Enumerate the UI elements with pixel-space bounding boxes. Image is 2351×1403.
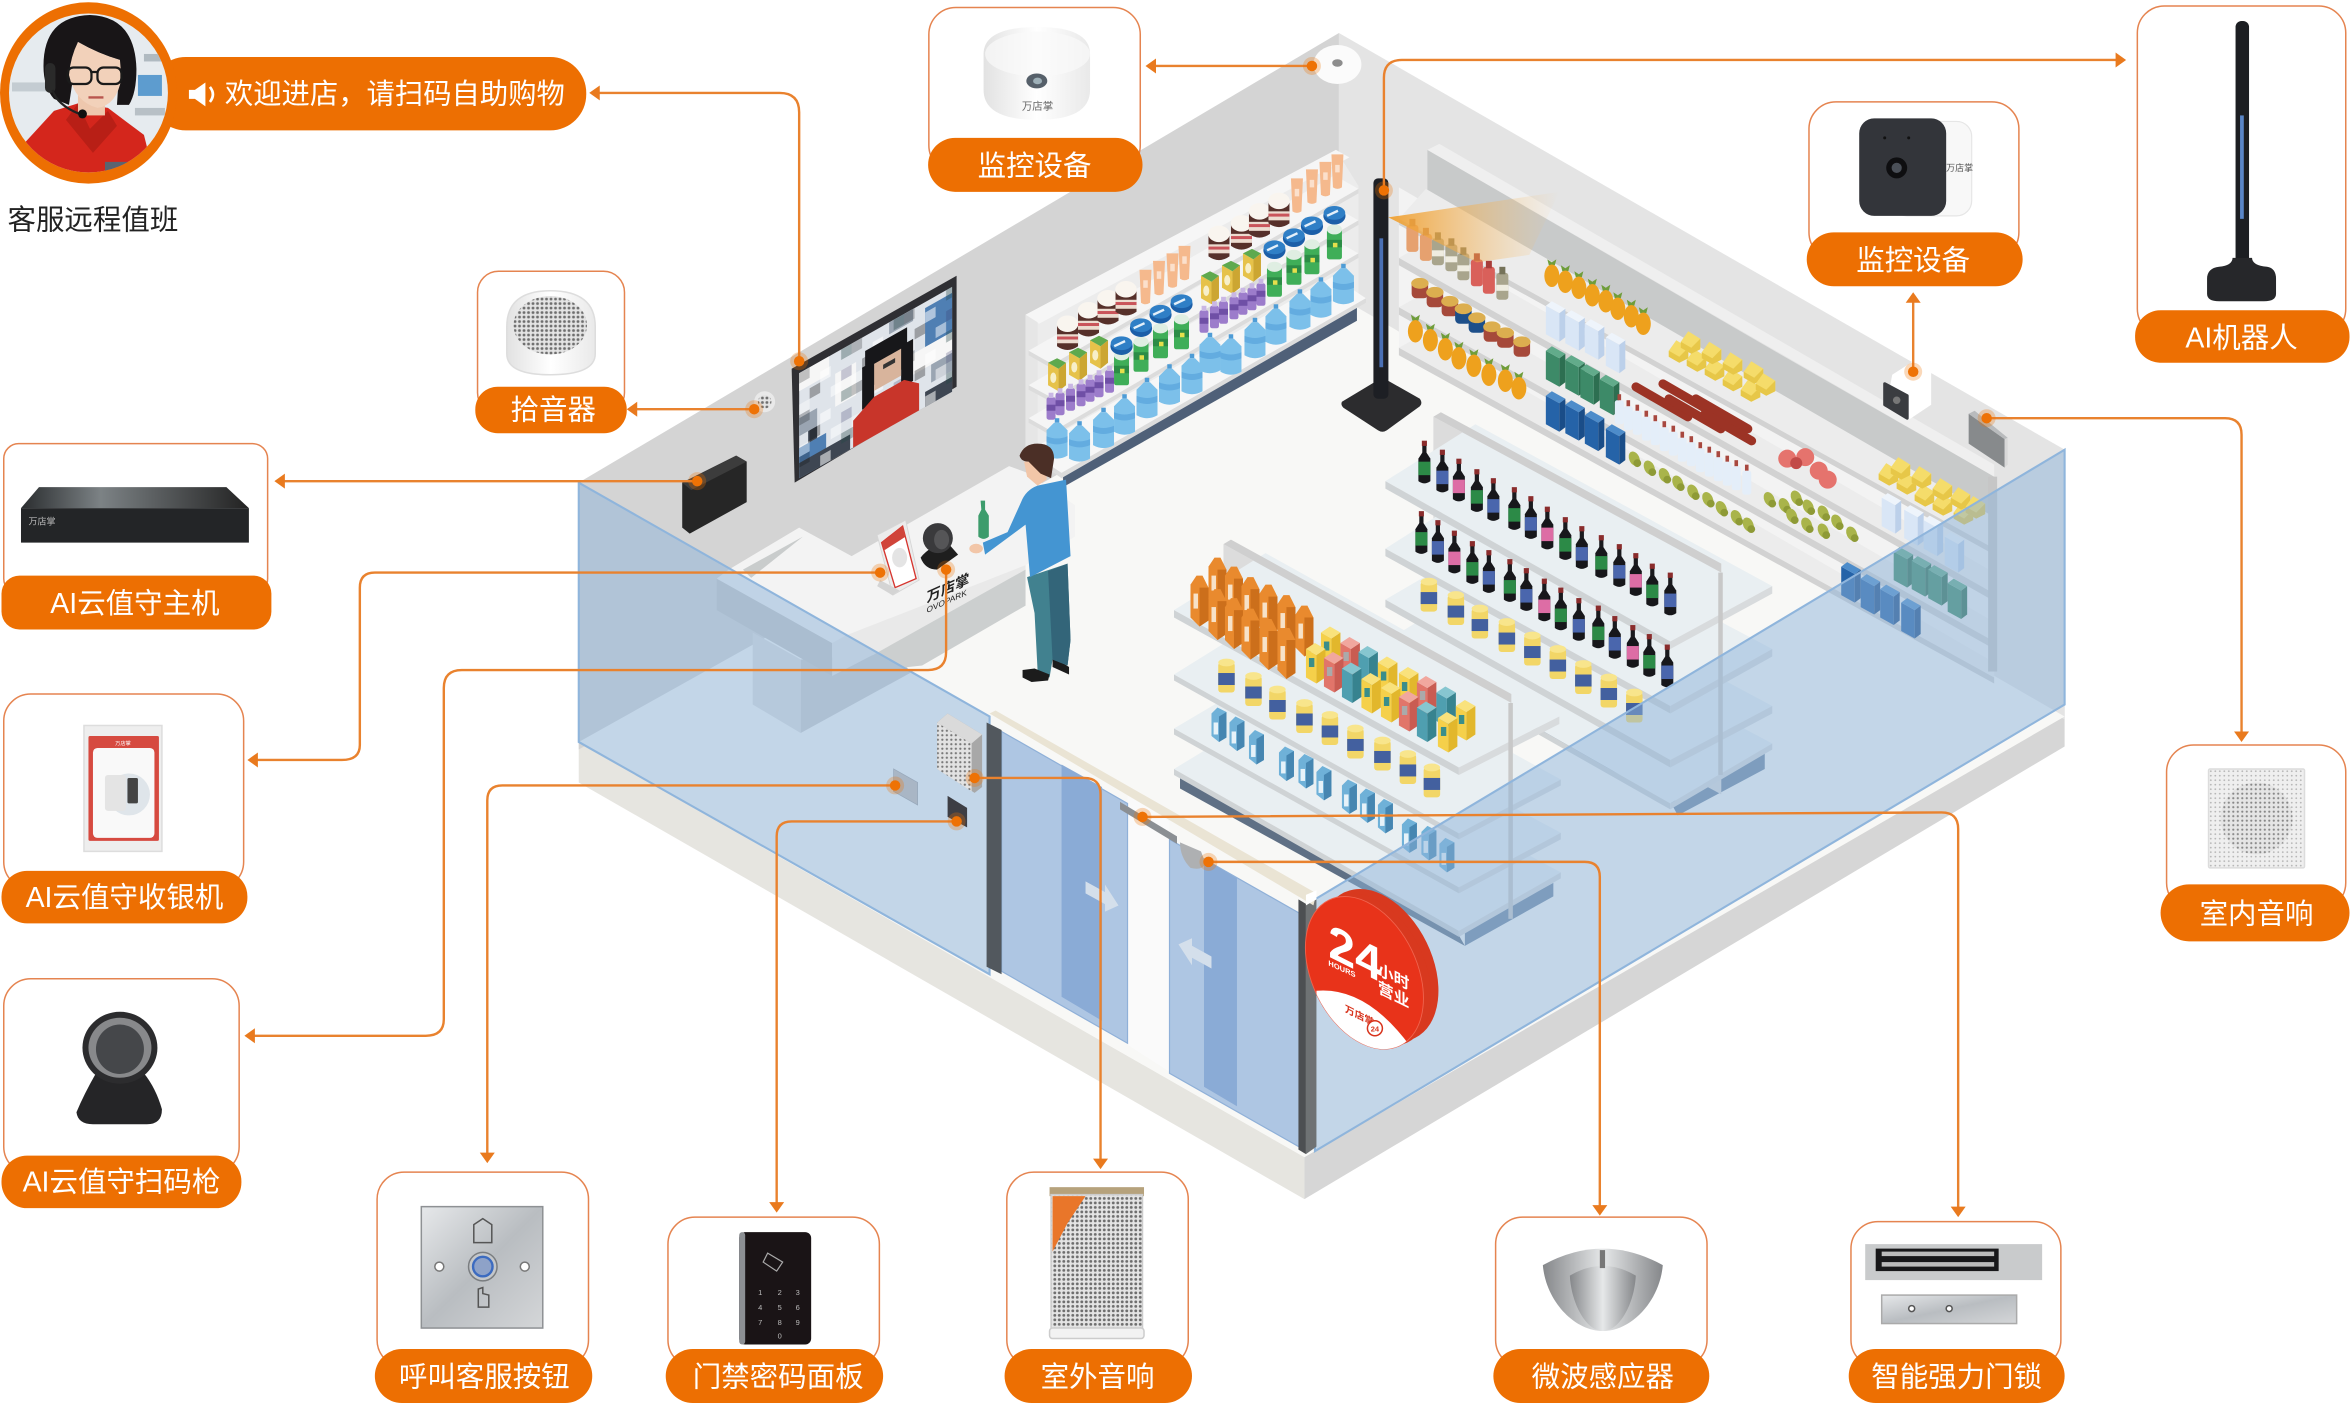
connector: outdoor speaker (966, 769, 1108, 1169)
icon: dome sensor (1543, 1249, 1663, 1331)
device: indoor wall speaker (1969, 411, 2008, 468)
icon: keypad: 3 (796, 1288, 800, 1297)
label: 监控设备 (1856, 245, 1970, 277)
panel: AI robot (2135, 6, 2350, 363)
panel: smart magnetic lock (1849, 1222, 2065, 1403)
icon: keypad: 0 (778, 1332, 782, 1341)
round 24 hour sign (1282, 870, 1462, 1069)
label: 监控设备 (978, 150, 1092, 182)
person scanning a product (969, 444, 1071, 682)
connector: AI host (274, 472, 706, 490)
store base plinth (579, 704, 2065, 1199)
connector: wall camera (1904, 292, 1922, 381)
label: 室外音响 (1041, 1362, 1154, 1394)
connector: sound pickup (627, 400, 763, 418)
label (1493, 1349, 1709, 1403)
round 24 hour sign: 小时 (1378, 960, 1410, 994)
icon: robot pole (2207, 21, 2276, 301)
connector: microwave sensor (1199, 853, 1607, 1216)
label: AI云值守收银机 (26, 882, 223, 914)
device: cashier terminal on counter (877, 520, 919, 595)
icon: magnetic lock (1865, 1244, 2042, 1324)
panel: wall monitoring device (1807, 102, 2023, 286)
label (1005, 1349, 1192, 1403)
glass front walls (579, 450, 2065, 1151)
upper gondola shelf with wine and cans (1385, 412, 1772, 815)
device: call button plate (894, 769, 918, 805)
label (928, 138, 1143, 192)
icon: ceiling camera: 万店掌 (1022, 99, 1053, 112)
caption: 客服远程值班 (7, 204, 178, 236)
connector: access keypad (769, 812, 966, 1213)
label: 门禁密码面板 (693, 1362, 864, 1394)
connector: greeting to TV (589, 85, 808, 370)
label: AI云值守扫码枪 (23, 1167, 220, 1199)
label: 微波感应器 (1532, 1362, 1674, 1394)
round 24 hour sign: 营业 (1378, 978, 1409, 1012)
panel: outdoor speaker (1005, 1172, 1192, 1403)
round 24 hour sign: HOURS (1328, 959, 1355, 979)
label: 呼叫客服按钮 (399, 1362, 570, 1394)
speech bubble: 欢迎进店，请扫码自助购物 (225, 78, 565, 110)
label: AI机器人 (2185, 323, 2298, 355)
panel: AI cashier (1, 694, 247, 923)
connector: smart lock (1134, 808, 1966, 1217)
panel: AI scanner (1, 979, 241, 1208)
connector: AI scanner (244, 561, 955, 1043)
icon: keypad: 7 (758, 1318, 762, 1327)
illustration: isometric store (579, 33, 2065, 1199)
icon: keypad: 9 (796, 1318, 800, 1327)
label (666, 1349, 883, 1403)
right wall shelving (1399, 144, 1997, 684)
icon: keypad (739, 1232, 811, 1345)
icon: barcode scanner (76, 1012, 162, 1124)
avatar portrait (0, 0, 180, 187)
icon: keypad: 2 (778, 1288, 782, 1297)
label: 拾音器 (511, 395, 596, 427)
label: 室内音响 (2200, 898, 2313, 930)
back walls (579, 33, 2065, 749)
icon: horn speaker (1050, 1187, 1144, 1339)
icon: NVR box (21, 487, 249, 543)
label (1, 871, 247, 923)
icon: ceiling speaker (2209, 769, 2305, 868)
round 24 hour sign: 24 (1371, 1024, 1380, 1033)
lower gondola shelf with cartons and cans (1174, 540, 1561, 946)
icon: NVR box: 万店掌 (29, 516, 55, 527)
label: 智能强力门锁 (1871, 1362, 2042, 1394)
speech bubble (150, 57, 586, 130)
automatic sliding doors (987, 710, 1316, 1154)
label (375, 1349, 592, 1403)
left wall shelf (1026, 150, 1366, 487)
checkout counter (717, 466, 1075, 733)
device: outdoor speaker on glass (937, 713, 982, 793)
device: AI robot pole (1341, 178, 1559, 432)
icon: cube camera: 万店掌 (1946, 162, 1973, 173)
icon: keypad: 6 (796, 1303, 800, 1312)
icon: silver microphone (507, 291, 595, 375)
connector: AI robot (1375, 52, 2126, 199)
panel: call button (375, 1172, 592, 1403)
panel: access keypad (666, 1217, 883, 1403)
icon: keypad: 5 (778, 1303, 782, 1312)
connector: call button (480, 776, 904, 1163)
connector: AI cashier (247, 564, 889, 767)
door electromagnetic lock bar (1120, 802, 1177, 844)
device: wall camera (1885, 361, 1931, 420)
device: wall sound pickup (754, 391, 775, 412)
panel: sound pickup (475, 271, 627, 433)
device: access keypad (948, 796, 967, 827)
panel: ceiling monitoring device (928, 7, 1143, 192)
icon: keypad: 4 (758, 1303, 762, 1312)
label (1849, 1349, 2065, 1403)
label (2161, 884, 2350, 941)
device: NVR host on wall (682, 456, 747, 534)
icon: keypad: 1 (758, 1288, 762, 1297)
device: ceiling camera (1313, 45, 1361, 84)
round 24 hour sign: 24 (1328, 913, 1382, 994)
microwave sensor above door (1180, 842, 1205, 869)
label (1, 576, 271, 630)
connector: indoor speaker (1978, 409, 2249, 742)
device: barcode scanner on counter (921, 523, 958, 570)
panel: AI host (1, 444, 271, 630)
icon: ceiling camera (984, 27, 1090, 120)
label: AI云值守主机 (50, 588, 220, 620)
icon: speaker (189, 82, 213, 106)
label (1, 1156, 241, 1208)
brand mark on counter: OVOPARK (927, 587, 967, 615)
icon: keypad: 8 (778, 1318, 782, 1327)
icon: stainless button (421, 1207, 543, 1328)
label (2135, 310, 2350, 363)
connector: ceiling camera (1146, 57, 1321, 75)
label (1807, 232, 2023, 286)
floor (579, 307, 2065, 1157)
icon: cashier tablet: 万店掌 (115, 739, 131, 747)
round 24 hour sign: 万店掌 (1345, 1002, 1374, 1029)
label (475, 387, 627, 433)
brand mark on counter: 万店掌 (927, 570, 969, 606)
panel: remote customer service (0, 0, 586, 236)
wall TV screen with mosaic (792, 276, 957, 483)
panel: microwave sensor (1493, 1217, 1709, 1403)
panel: indoor speaker (2161, 745, 2350, 941)
icon: cashier tablet (84, 725, 162, 851)
icon: cube camera (1859, 118, 1973, 216)
